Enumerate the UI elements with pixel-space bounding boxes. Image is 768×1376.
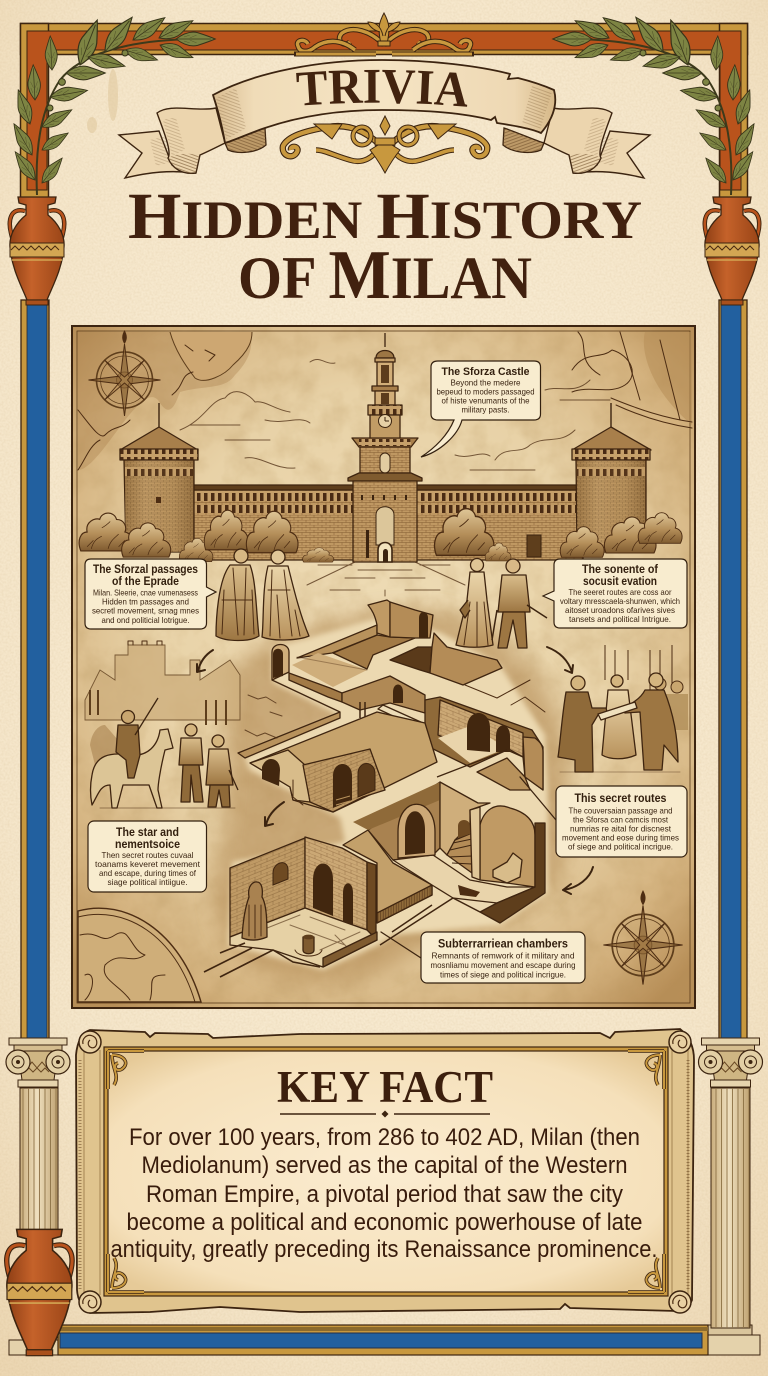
well — [303, 937, 314, 954]
clouds — [180, 359, 610, 470]
callout: The Sforza Castle: bepeud to moders passaged — [436, 386, 535, 396]
castle right round tower — [572, 403, 651, 552]
callout: The Sforzal passages of the Eprade: of the Eprade — [112, 574, 179, 588]
map panel: Sforza castle illustration — [72, 326, 695, 1008]
callout: This secret routes: This secret routes — [574, 791, 667, 805]
figures: lady and swordsman — [456, 558, 547, 648]
ribbon banner with TRIVIA — [117, 59, 652, 180]
left column — [6, 1038, 70, 1355]
callout: The Sforzal passages of the Eprade: Hidden tm passages and — [102, 596, 189, 606]
heading: KEY FACT: KEY FACT — [277, 1062, 493, 1112]
key fact paragraph: become a political and economic powerhouse of late — [126, 1209, 642, 1236]
figures: two cloaked nobles — [216, 549, 309, 640]
pointer arrows — [197, 647, 593, 958]
main title: OF MILAN — [238, 237, 532, 314]
callout: Subterrarriean chambers: Subterrarriean chambers — [438, 936, 568, 950]
callout: Subterrarriean chambers: Remnants of remwork of it military and — [432, 950, 575, 960]
amphora: top left — [10, 197, 64, 305]
callout: This secret routes: the Sforsa can camcis most — [573, 814, 669, 824]
amphora: top right — [705, 197, 759, 305]
heading divider — [280, 1110, 490, 1118]
callout: The star and nementsoice: Then secret routes cuvaal — [102, 850, 194, 860]
callout: This secret routes: numrias re aital for discnest — [570, 824, 672, 834]
callout: The Sforzal passages of the Eprade: and ond politicial lotrigue. — [102, 615, 190, 625]
callout: The star and nementsoice: The star and — [116, 825, 179, 839]
decorative frame: top band and side bands — [20, 24, 748, 1040]
laurel branch: left — [9, 12, 215, 195]
castle central clock tower — [348, 333, 422, 562]
main title: HIDDEN HISTORY — [128, 180, 642, 253]
main title — [128, 180, 642, 314]
smudged shadow around the excavation — [215, 610, 570, 982]
callout: The Sforza Castle: The Sforza Castle — [442, 366, 530, 378]
compass rose: top left — [88, 330, 160, 416]
callout: The star and nementsoice: toanams keveret mevement — [95, 859, 201, 869]
key fact scroll panel — [76, 1029, 694, 1313]
callout: The sonente of socusit evation: tansets and political Intrigue. — [569, 614, 671, 624]
callout: The Sforzal passages of the Eprade — [85, 559, 216, 629]
callout: This secret routes — [556, 786, 687, 857]
amphora: bottom left — [7, 1229, 72, 1356]
key fact paragraph: For over 100 years, from 286 to 402 AD, Milan (then — [129, 1124, 640, 1151]
callout: The sonente of socusit evation: The seeret routes are coss aor — [568, 587, 672, 597]
left town and riders scene — [85, 641, 240, 808]
callout: The Sforza Castle — [421, 361, 540, 457]
callout: The star and nementsoice: nementsoice — [115, 837, 180, 851]
callout: The star and nementsoice — [88, 821, 206, 892]
laurel branch: right — [553, 12, 759, 195]
key fact paragraph — [110, 1124, 658, 1263]
callout: The sonente of socusit evation: The sonente of — [582, 562, 659, 576]
underground room: two arches centre left — [250, 712, 437, 812]
key fact paragraph: Mediolanum) served as the capital of the Western — [142, 1152, 628, 1179]
aged corners and old map fragments — [78, 332, 692, 470]
old map disc: bottom left — [78, 908, 201, 1002]
underground room: bottom left chamber — [204, 837, 480, 977]
callout: The Sforza Castle: military pasts. — [462, 404, 510, 414]
underground room: large vaulted chamber — [343, 782, 545, 923]
ornament beneath banner — [283, 116, 487, 173]
callout: This secret routes: movement and eose during times — [562, 832, 679, 842]
callout: The star and nementsoice: and escape, during times of — [99, 868, 197, 878]
right column — [698, 1038, 762, 1355]
callout: The Sforzal passages of the Eprade: secretl movement, srnag mnes — [92, 606, 199, 616]
callout: The sonente of socusit evation — [543, 559, 687, 628]
callout: The Sforza Castle: of histe venumants of the — [442, 396, 530, 406]
base band: blue plinth — [58, 1325, 708, 1355]
figure: hooded monk — [242, 882, 267, 940]
callout: The Sforzal passages of the Eprade: Milan. Sleerie, cnae vumenasess — [93, 588, 198, 598]
right scene: handover of scroll with soldiers — [558, 645, 688, 772]
underground room: top pits — [297, 600, 545, 712]
castle left round tower — [120, 403, 198, 552]
callout: Subterrarriean chambers: mosnliamu movement and escape during — [430, 960, 576, 970]
top centre ornament — [294, 13, 474, 54]
two foot soldiers — [185, 724, 197, 736]
key fact paragraph: Roman Empire, a pivotal period that saw the city — [146, 1181, 624, 1208]
dark shaft — [390, 647, 432, 673]
callout: This secret routes: The couversaian passage and — [568, 806, 673, 816]
underground room: two arches centre right — [425, 697, 543, 790]
callout: The sonente of socusit evation: aitoset uroadons ofarives sives — [565, 605, 675, 615]
callout: The sonente of socusit evation: voltary mresscaela-shunwen, which — [560, 596, 680, 606]
trees by the walls — [79, 509, 682, 562]
callout: Subterrarriean chambers: times of siege and political incrigue. — [440, 970, 566, 980]
courtyard paving — [307, 562, 465, 596]
callout: Subterrarriean chambers — [421, 932, 585, 983]
callout: The Sforzal passages of the Eprade: The Sforzal passages — [93, 562, 198, 576]
horse and rider — [90, 729, 173, 808]
key fact paragraph: antiquity, greatly preceding its Renaissance prominence. — [110, 1236, 658, 1263]
underground room: left door, long wall and plateau — [238, 644, 367, 758]
callout: The star and nementsoice: siage political intiigue. — [108, 877, 188, 887]
castle curtain walls — [189, 485, 583, 560]
light floor of the underground passages — [228, 618, 548, 970]
callout: This secret routes: of siege and political incrigue. — [568, 842, 673, 852]
compass rose: bottom right — [603, 890, 683, 985]
callout: The Sforza Castle: Beyond the medere — [450, 378, 521, 388]
underground room: small arch chamber — [342, 676, 425, 723]
callout: The sonente of socusit evation: socusit evation — [583, 574, 657, 588]
title text: TRIVIA: TRIVIA — [296, 70, 468, 107]
